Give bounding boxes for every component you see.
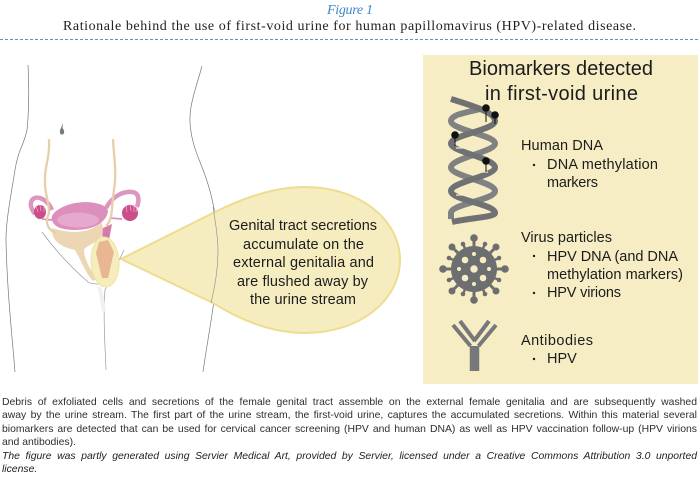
virus text: HPV DNA (and DNA	[547, 249, 678, 265]
genital highlight	[90, 236, 120, 288]
uterus	[52, 202, 108, 230]
panel: biomarkers	[423, 55, 698, 384]
cervix	[102, 224, 112, 240]
antibodies text	[521, 333, 593, 367]
virus text: HPV virions	[547, 285, 621, 301]
human DNA text: markers	[547, 175, 598, 191]
panel heading: Biomarkers detected	[469, 58, 653, 80]
caption text: The figure was partly generated using Servier Medical Art, provided by Servier, licensed under a Creative Commons Attribution 3.0 unported	[2, 451, 697, 462]
caption text: away by the urine stream. The first part of the urine stream, the first-void urine, captures the accumulated secretions. Within this material several	[2, 410, 697, 421]
vagina	[96, 240, 114, 278]
human DNA text: DNA methylation	[547, 157, 658, 173]
bubble text: accumulate on the	[243, 237, 364, 253]
caption text	[2, 397, 698, 475]
navel	[60, 123, 64, 135]
human DNA text: Human DNA	[521, 138, 603, 154]
bubble text: the urine stream	[250, 292, 356, 308]
left fallopian tube	[31, 198, 52, 214]
ureters	[45, 139, 115, 233]
human DNA text	[521, 138, 658, 191]
virus text: methylation markers)	[547, 267, 683, 283]
icon: antibody	[453, 321, 496, 371]
bubble text: Genital tract secretions	[229, 218, 377, 234]
ligaments	[42, 218, 122, 220]
left ovary	[34, 205, 46, 219]
caption text: and antibodies).	[2, 437, 76, 448]
bladder	[52, 222, 103, 281]
figure number: Figure 1	[326, 3, 373, 18]
panel heading	[469, 58, 653, 105]
bubble text	[229, 218, 377, 308]
body outline	[6, 65, 218, 372]
methylation pins	[452, 105, 498, 172]
antibodies text: HPV	[547, 351, 577, 367]
icon: virus	[439, 234, 509, 304]
bubble text: external genitalia and	[233, 255, 374, 271]
hip line over bubble	[211, 207, 218, 303]
right fallopian tube	[106, 192, 138, 208]
figure title: Rationale behind the use of first-void urine for human papillomavirus (HPV)-related disease.	[63, 19, 636, 34]
icon: DNA helix	[451, 99, 498, 222]
virus text	[521, 230, 683, 301]
reproductive anatomy	[31, 139, 138, 288]
right ovary	[122, 204, 138, 221]
bubble text: are flushed away by	[237, 274, 369, 290]
caption text: Debris of exfoliated cells and secretions of the female genital tract assemble on the external female genitalia and are subsequently washed	[2, 397, 697, 408]
caption text: license.	[2, 464, 37, 475]
antibodies text: Antibodies	[521, 333, 593, 349]
panel heading: in first-void urine	[485, 83, 638, 105]
virus text: Virus particles	[521, 230, 612, 246]
caption text: biomarkers are detected that can be used for cervical cancer screening (HPV and human DNA) as well as HPV vaccination follow-up (HPV virions	[2, 424, 697, 435]
speech bubble	[121, 187, 400, 333]
